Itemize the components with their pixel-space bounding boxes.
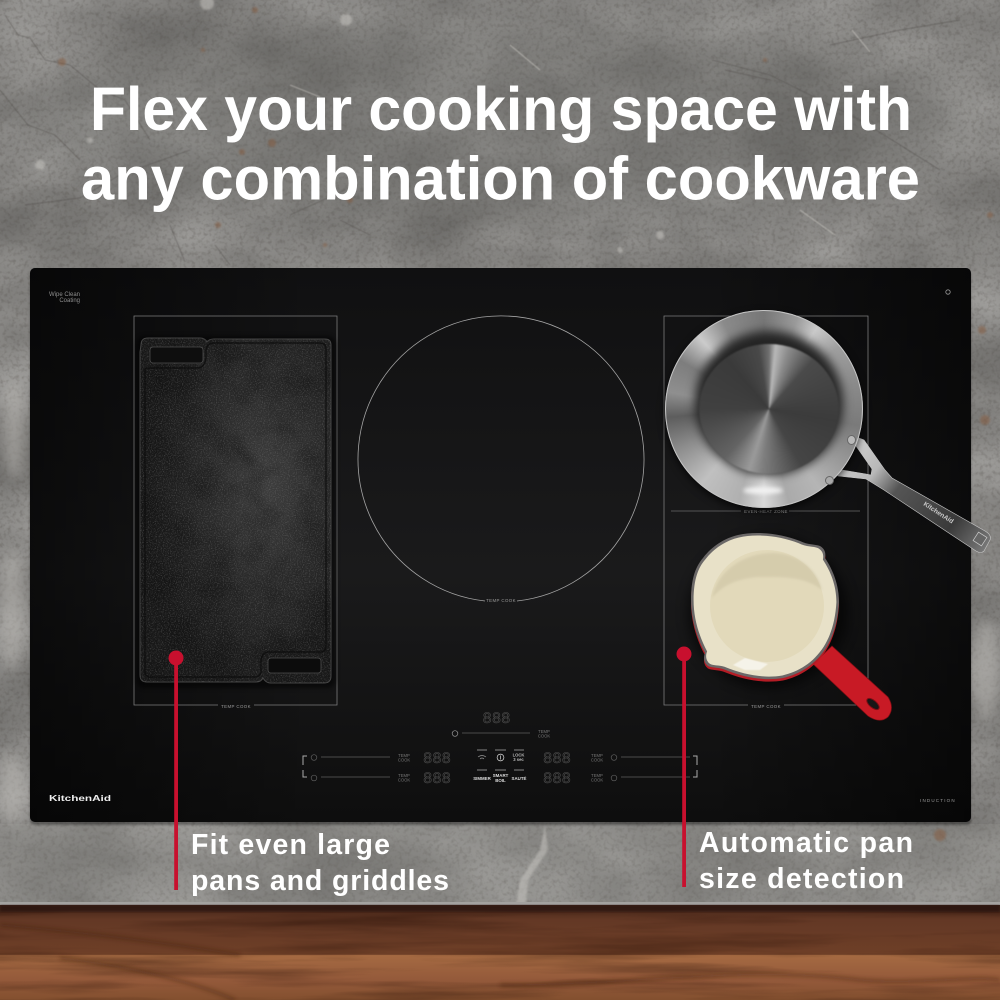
centre function buttons: LOCK (513, 752, 524, 758)
title: Flex your cooking space with (90, 75, 912, 144)
right displays: 888 (543, 750, 571, 768)
right displays: 888 (543, 770, 571, 788)
top display: 888 (483, 710, 510, 728)
title (81, 75, 920, 214)
right sliders (591, 753, 690, 782)
rivet lower (825, 476, 834, 485)
left cooking zone outline (134, 316, 337, 709)
rivet upper (847, 435, 856, 445)
bright reflection on lower wall (743, 487, 783, 494)
red pan handle (813, 646, 892, 720)
left displays (423, 750, 451, 788)
wood surface (0, 905, 1000, 1000)
top slider: TEMP (538, 729, 550, 734)
control panel (303, 710, 697, 788)
top slider: COOK (538, 734, 550, 738)
right callout marker (676, 646, 692, 887)
right displays (543, 750, 571, 788)
left callout text (191, 829, 449, 897)
pan rim edge (665, 310, 863, 508)
left bracket (303, 756, 307, 777)
right callout text: size detection (699, 863, 904, 895)
right cooking zone outline: EVEN-HEAT ZONE (744, 509, 788, 514)
steel pan handle (836, 436, 990, 552)
left callout marker (168, 650, 184, 890)
right sliders: COOK (591, 778, 603, 782)
centre function buttons: SIMMER (473, 776, 492, 781)
centre cooking zone ring: TEMP COOK (486, 598, 516, 603)
left sliders: COOK (398, 778, 410, 782)
cooktop panel (30, 268, 971, 825)
pan interior (710, 550, 824, 662)
pan rim (691, 533, 839, 679)
right bracket (693, 756, 697, 777)
top slider (452, 729, 550, 738)
red enamel pan (688, 533, 892, 720)
griddle (136, 336, 336, 688)
left cooking zone outline: TEMP COOK (221, 704, 251, 709)
right cooking zone outline: TEMP COOK (751, 704, 781, 709)
left displays: 888 (423, 750, 451, 768)
right callout text: Automatic pan (699, 827, 913, 859)
right sliders: TEMP (591, 753, 603, 758)
induction label: INDUCTION (920, 798, 956, 803)
wipe clean coating label: Wipe Clean (49, 292, 80, 298)
red pan underside (691, 536, 839, 682)
griddle top handle opening (150, 347, 203, 363)
left sliders: TEMP (398, 753, 410, 758)
left sliders: TEMP (398, 773, 410, 778)
KitchenAid logo: KitchenAid (49, 793, 111, 803)
coating label second line: Coating (59, 298, 80, 304)
left callout text: Fit even large (191, 829, 390, 861)
centre cooking zone ring (358, 316, 644, 603)
steel pan handle: KitchenAid (922, 501, 955, 525)
centre function buttons: SAUTÉ (512, 776, 527, 781)
centre function buttons: BOIL (495, 778, 506, 783)
title: any combination of cookware (81, 144, 920, 214)
left displays: 888 (423, 770, 451, 788)
right cooking zone outline (664, 316, 868, 709)
centre function buttons: 3 sec (513, 757, 524, 762)
right callout text (699, 827, 913, 895)
centre function buttons (473, 750, 527, 783)
power indicator (946, 290, 950, 294)
left callout text: pans and griddles (191, 865, 449, 897)
left sliders (311, 753, 410, 782)
left sliders: COOK (398, 758, 410, 762)
pan shadowed wall (695, 331, 843, 475)
right sliders: TEMP (591, 773, 603, 778)
centre function buttons: SMART (493, 773, 509, 778)
steel frying pan (665, 310, 863, 508)
pan base with spun metal highlight (699, 344, 839, 474)
griddle bottom handle opening (268, 658, 321, 673)
right sliders: COOK (591, 758, 603, 762)
